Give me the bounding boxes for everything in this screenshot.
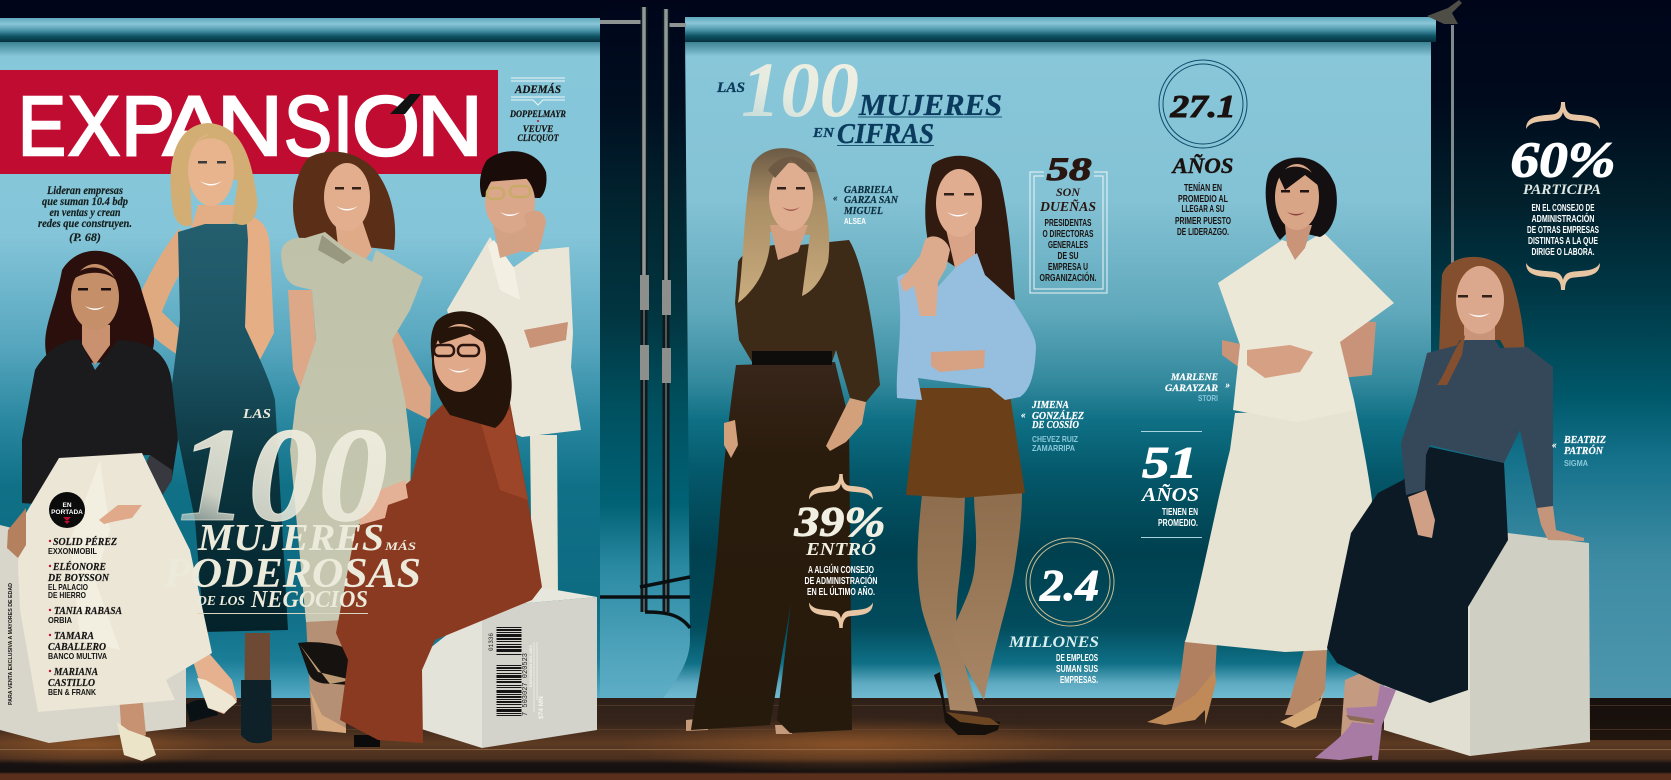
- stat: 27.1 años: LLEGAR A SU: [1182, 203, 1224, 215]
- block: además: [509, 78, 566, 143]
- left box: [0, 525, 186, 743]
- cover list of names: SOLID PÉREZ: [53, 536, 117, 548]
- masthead: Expansión: O: [352, 79, 420, 173]
- figure: Jimena González de Cossío: [897, 156, 1036, 735]
- cover deck text: (P. 68): [69, 230, 101, 244]
- cover list of names: EXXONMOBIL: [48, 546, 97, 556]
- name label: Gabriela: MIGUEL: [843, 206, 883, 217]
- stat: 51 años: AÑOS: [1140, 483, 1199, 506]
- name label: Marlene: »: [1224, 380, 1230, 390]
- cover headline: 100: [178, 401, 388, 550]
- cover list of names: ORBIA: [48, 615, 72, 625]
- heading: las 100 mujeres en cifras: [716, 46, 1002, 150]
- name label: Marlene: MARLENE: [1170, 373, 1218, 383]
- stat: 60% participa: ADMINISTRACIÓN: [1532, 212, 1594, 225]
- name label: Jimena: CHEVEZ RUIZ: [1032, 434, 1078, 444]
- stat: 2.4 millones: MILLONES: [1008, 634, 1099, 651]
- stat: 27.1 años: 27.1: [1169, 88, 1236, 124]
- stat: 60% participa: [1510, 102, 1616, 290]
- name label: Gabriela: GABRIELA: [844, 185, 893, 196]
- name label: Jimena: «: [1021, 410, 1026, 420]
- stat: 27.1 años: AÑOS: [1170, 153, 1234, 178]
- cover list of names: BANCO MULTIVA: [48, 651, 107, 661]
- cover list of names: CABALLERO: [48, 641, 106, 653]
- stat: 58 son dueñas: O DIRECTORAS: [1042, 228, 1094, 240]
- stat: 51 años: PROMEDIO.: [1158, 517, 1198, 529]
- cover headline: LAS: [242, 407, 271, 422]
- stat: 2.4 millones: SUMAN SUS: [1056, 663, 1098, 675]
- heading: las 100 mujeres en cifras: LAS: [716, 80, 745, 96]
- heading: las 100 mujeres en cifras: MUJERES: [858, 87, 1002, 122]
- figure: Gabriela Garza San Miguel: [686, 148, 880, 734]
- stat: 2.4 millones: 2.4: [1039, 561, 1099, 610]
- heading: las 100 mujeres en cifras: CIFRAS: [837, 119, 934, 150]
- barcode: EXPANSIÓN DEL MES: [528, 645, 533, 687]
- stat: 58 son dueñas: GENERALES: [1048, 239, 1088, 251]
- cover headline: MUJERES: [197, 517, 384, 559]
- masthead: Expansión: I: [333, 79, 353, 173]
- cover deck text: redes que construyen.: [38, 216, 132, 230]
- stat: 27.1 años: DE LIDERAZGO.: [1177, 226, 1229, 238]
- name label: Gabriela: [833, 185, 899, 226]
- stat: 2.4 millones: EMPRESAS.: [1060, 674, 1098, 686]
- barcode: [488, 627, 545, 719]
- cover list of names: ELÉONORE: [52, 561, 106, 573]
- cover headline: [163, 401, 421, 614]
- cover headline: MÁS: [384, 539, 416, 553]
- stat: 2.4 millones: DE EMPLEOS: [1056, 652, 1098, 664]
- name label: Gabriela: ALSEA: [844, 216, 866, 226]
- figure: Marlene Garayzar: [1147, 158, 1394, 728]
- stat: 51 años: 51: [1142, 438, 1197, 487]
- wooden floor: [0, 698, 1671, 780]
- stat: 39% entró: EN EL ÚLTIMO AÑO.: [807, 585, 875, 598]
- name label: Jimena: DE COSSÍO: [1031, 419, 1079, 431]
- right stand and clamp: [1427, 0, 1462, 270]
- stat: 39% entró: 39%: [793, 500, 886, 546]
- cover list of names: DE BOYSSON: [47, 572, 110, 584]
- figure: woman in teal dress: [134, 123, 288, 743]
- figure: woman in white suit: [447, 151, 581, 600]
- stat: 2.4 millones: [1008, 538, 1114, 686]
- name label: Jimena: ZAMARRIPA: [1032, 443, 1075, 453]
- figure: Beatriz Patrón seated on box: [1315, 257, 1590, 760]
- cover deck text: que suman 10.4 bdp: [42, 194, 128, 208]
- stat: 58 son dueñas: PRESIDENTAS: [1044, 217, 1092, 229]
- heading: las 100 mujeres en cifras: 100: [741, 46, 859, 133]
- cover list of names: EL PALACIO: [48, 582, 88, 592]
- name label: Beatriz: BEATRIZ: [1563, 435, 1606, 446]
- stat: 39% entró: ENTRÓ: [805, 538, 876, 559]
- light stands: [600, 7, 690, 628]
- cover list of names: TANIA RABASA: [54, 605, 122, 617]
- name label: Marlene: STORI: [1198, 394, 1218, 403]
- cover badge: en portada: EN: [62, 502, 72, 509]
- name label: Jimena: [1021, 400, 1084, 453]
- name label: Beatriz: [1552, 435, 1606, 468]
- heading: las 100 mujeres en cifras: EN: [812, 126, 835, 141]
- cover list of names: MARIANA: [53, 666, 98, 678]
- figure: seated woman in black blouse and white skirt: [7, 251, 237, 761]
- stat: 51 años: [1140, 431, 1202, 538]
- cover list of names: TAMARA: [54, 630, 94, 642]
- stat: 60% participa: DIRIGE O LABORA.: [1532, 246, 1595, 258]
- block: además: CLICQUOT: [518, 133, 559, 143]
- name label: Marlene: GARAYZAR: [1165, 384, 1218, 394]
- name label: Beatriz: «: [1552, 440, 1557, 450]
- stat: 39% entró: A ALGÚN CONSEJO: [808, 563, 874, 576]
- name label: Jimena: GONZÁLEZ: [1032, 410, 1084, 422]
- stat: 58 son dueñas: EMPRESA U: [1048, 261, 1088, 273]
- cover headline: DE LOS: [196, 594, 245, 609]
- stat: 27.1 años: TENÍAN EN: [1184, 181, 1222, 194]
- right box: [415, 588, 597, 748]
- masthead: Expansión: E: [18, 79, 66, 173]
- cover headline: NEGOCIOS: [250, 587, 368, 613]
- masthead: Expansión: [0, 70, 498, 174]
- stat: 27.1 años: [1159, 60, 1247, 238]
- name label: Beatriz: PATRÓN: [1564, 445, 1604, 457]
- block: además: VEUVE: [523, 124, 553, 134]
- cover list of names: [47, 536, 122, 697]
- stat: 60% participa: DE OTRAS EMPRESAS: [1527, 224, 1599, 236]
- barcode: 01336: [488, 633, 495, 651]
- figure: seated woman in rust dress: [298, 311, 542, 747]
- masthead: Expansión: X: [68, 79, 120, 173]
- cover list of names: CASTILLO: [48, 677, 95, 689]
- stat: 27.1 años: PROMEDIO AL: [1178, 193, 1228, 205]
- stat: 60% participa: EN EL CONSEJO DE: [1532, 202, 1594, 214]
- vertical legal text: PARA VENTA EXCLUSIVA A MAYORES DE EDAD: [8, 583, 14, 705]
- figure: woman in sage dress: [281, 152, 431, 733]
- cover list of names: BEN & FRANK: [48, 687, 97, 697]
- stat: 58 son dueñas: 58: [1046, 152, 1092, 188]
- block: además: DOPPELMAYR: [509, 109, 566, 119]
- cover badge: en portada: PORTADA: [51, 509, 83, 516]
- masthead: Expansión: A: [163, 79, 225, 173]
- stat: 39% entró: DE ADMINISTRACIÓN: [804, 574, 878, 587]
- stat: 58 son dueñas: DE SU: [1058, 250, 1078, 262]
- cover list of names: DE HIERRO: [48, 590, 86, 600]
- stat: 51 años: TIENEN EN: [1162, 506, 1198, 518]
- masthead: Expansión: S: [284, 79, 332, 173]
- cover badge: en portada: [51, 502, 83, 524]
- stat: 60% participa: DISTINTAS A LA QUE: [1528, 235, 1598, 247]
- name label: Jimena: JIMENA: [1031, 400, 1069, 411]
- stat: 60% participa: 60%: [1510, 131, 1616, 187]
- name label: Beatriz: SIGMA: [1564, 458, 1588, 468]
- name label: Gabriela: GARZA SAN: [844, 195, 899, 206]
- block: además: ADEMÁS: [514, 82, 561, 96]
- stat: 27.1 años: PRIMER PUESTO: [1175, 215, 1231, 227]
- stat: 58 son dueñas: DUEÑAS: [1039, 197, 1096, 215]
- stat: 58 son dueñas: ORGANIZACIÓN.: [1040, 271, 1097, 284]
- masthead: Expansión: N: [217, 79, 283, 173]
- cover deck text: [38, 183, 132, 244]
- masthead: Expansión: P: [121, 79, 175, 173]
- name label: Marlene: [1165, 373, 1230, 403]
- stat: 39% entró: [793, 474, 886, 628]
- cover deck text: Lideran empresas: [46, 183, 123, 197]
- cover deck text: en ventas y crean: [50, 205, 121, 219]
- barcode: 7 503027 020523: [522, 653, 530, 716]
- stat: 58 son dueñas: SON: [1056, 185, 1081, 199]
- masthead: Expansión: N: [417, 79, 483, 173]
- barcode: $74 MN: [538, 696, 545, 719]
- cover headline: PODEROSAS: [163, 551, 421, 597]
- stat: 58 son dueñas: [1030, 152, 1107, 293]
- stat: 60% participa: PARTICIPA: [1523, 182, 1601, 198]
- name label: Gabriela: «: [833, 193, 838, 203]
